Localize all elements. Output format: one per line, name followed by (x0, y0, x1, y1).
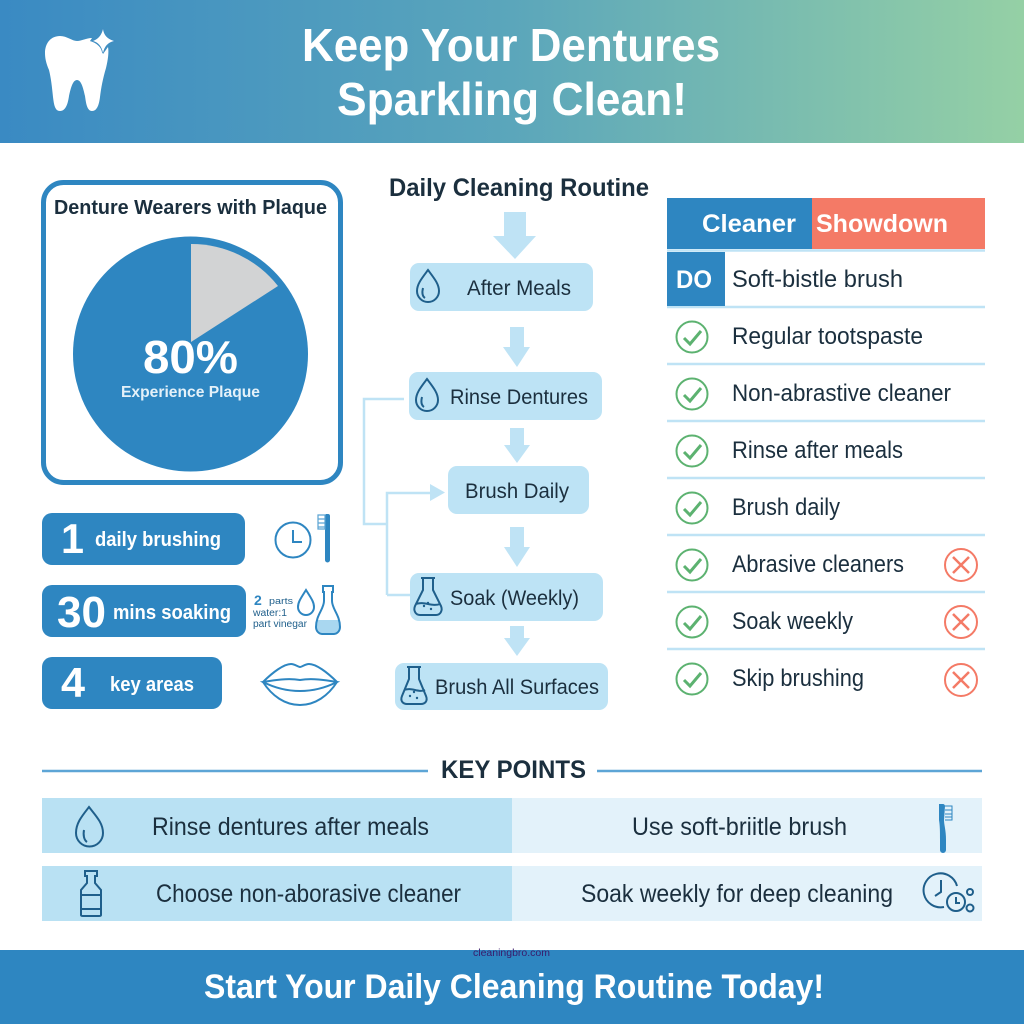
step: rinse dentures (409, 372, 602, 420)
title: Keep Your Dentures (302, 19, 720, 71)
step: brush daily: Brush Daily (465, 479, 569, 503)
row: soak weekly: Soak weekly (732, 608, 853, 635)
step: soak weekly: Soak (Weekly) (450, 586, 579, 610)
soaking recipe note: parts (269, 596, 294, 606)
footer banner: Start Your Daily Cleaning Routine Today! (204, 968, 824, 1006)
key point: non-abrasive cleaner: Choose non-aborasive cleaner (156, 880, 461, 908)
stat: 4 key areas: key areas (110, 674, 194, 696)
arrow: to brush all surfaces (504, 626, 530, 656)
soaking recipe note: 2 (254, 592, 262, 608)
pie chart: Experience Plaque (121, 384, 260, 401)
watermark: cleaningbro.com (473, 948, 550, 959)
icon: bottle (81, 871, 101, 916)
stat: 1 daily brushing: 1 (61, 515, 84, 562)
row: skip brushing: Skip brushing (732, 665, 864, 692)
arrow: into after meals (493, 212, 536, 259)
header banner (0, 0, 1024, 143)
row: rinse after meals (676, 436, 903, 466)
icon: flask (414, 578, 442, 615)
arrow: to soak (504, 527, 530, 567)
row: brush daily: Brush daily (732, 494, 840, 521)
pie chart: 80% (143, 331, 238, 383)
pie chart (73, 236, 308, 472)
table header (667, 198, 985, 249)
step: after meals (410, 263, 593, 311)
icon: clocks (924, 873, 974, 912)
soaking recipe note: part vinegar (253, 619, 308, 630)
title: Sparkling Clean! (337, 73, 687, 125)
row: regular toothpaste: Regular tootspaste (732, 323, 923, 350)
stat: 1 daily brushing (42, 513, 245, 565)
row: non-abrasive cleaner: Non-abrastive cleaner (732, 380, 951, 407)
icon: toothbrush (939, 804, 952, 853)
soaking recipe note (252, 592, 308, 630)
row: soak weekly (676, 606, 977, 638)
icon: drop and bottle (298, 586, 340, 634)
key point: rinse dentures: Rinse dentures after meals (152, 813, 429, 841)
stat: 4 key areas: 4 (61, 659, 86, 706)
step: after meals: After Meals (467, 276, 571, 300)
icon: flask (401, 667, 427, 704)
panel: cleaner showdown table (667, 198, 985, 696)
row: brush daily (676, 492, 840, 524)
row: regular toothpaste (676, 322, 923, 352)
stat: 30 mins soaking: mins soaking (113, 602, 231, 624)
key point: soft brush (512, 798, 982, 853)
arrow: to brush daily (504, 428, 530, 463)
flow heading: Daily Cleaning Routine (389, 174, 649, 202)
stat: 4 key areas (42, 657, 222, 709)
key point: soak weekly: Soak weekly for deep cleaning (581, 880, 893, 908)
step: brush all surfaces (395, 663, 608, 710)
arrow: to rinse (503, 327, 530, 367)
step: rinse dentures: Rinse Dentures (450, 385, 588, 409)
row: soft-bristle brush (667, 252, 903, 306)
panel heading: Denture Wearers with Plaque (54, 197, 327, 219)
row: soft-bristle brush: DO (676, 266, 712, 294)
row: abrasive cleaners: Abrasive cleaners (732, 551, 904, 578)
stat: 30 mins soaking: 30 (57, 588, 106, 637)
panel: denture wearers with plaque (44, 182, 340, 482)
stat: 30 mins soaking (42, 585, 246, 637)
key point: soft brush: Use soft-briitle brush (632, 813, 847, 841)
row: abrasive cleaners (676, 549, 977, 581)
key points heading: KEY POINTS (441, 756, 586, 784)
step: soak weekly (410, 573, 603, 621)
row: skip brushing (676, 664, 977, 696)
row: non-abrasive cleaner (676, 378, 951, 410)
icon: sparkling tooth (45, 29, 114, 111)
icon: water drop (416, 379, 438, 411)
flow connector lines (364, 399, 445, 595)
table header: Cleaner (702, 210, 796, 238)
footer banner (0, 950, 1024, 1024)
step: brush all surfaces: Brush All Surfaces (435, 675, 599, 699)
key point: soak weekly (512, 866, 982, 921)
icon: water drop (417, 270, 439, 302)
soaking recipe note: water:1 (252, 608, 287, 619)
icon: clock and toothbrush (276, 514, 330, 562)
key point: non-abrasive cleaner (42, 866, 512, 921)
icon: water drop (76, 807, 103, 846)
step: brush daily (448, 466, 589, 514)
table header: Showdown (816, 210, 948, 238)
icon: lips (263, 664, 337, 705)
title (302, 19, 720, 125)
row: soft-bristle brush: Soft-bistle brush (732, 266, 903, 293)
row: rinse after meals: Rinse after meals (732, 437, 903, 464)
stat: 1 daily brushing: daily brushing (95, 529, 221, 551)
key point: rinse dentures (42, 798, 512, 853)
